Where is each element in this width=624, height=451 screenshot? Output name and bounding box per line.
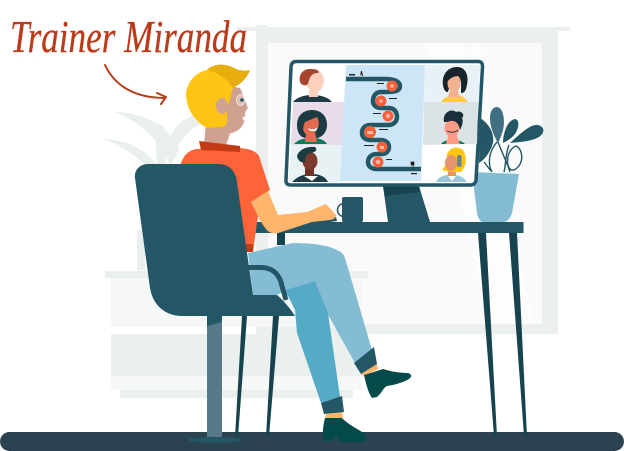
cuff upper [354, 347, 377, 374]
chair armrest [248, 268, 286, 300]
monitor stand [383, 186, 430, 222]
person 1 [293, 69, 332, 102]
glasses and mouth [236, 94, 247, 122]
shoe upper [364, 369, 411, 398]
face [206, 85, 248, 134]
screen frame [286, 62, 483, 185]
roadmap stops [364, 80, 398, 168]
leaf: far right [510, 125, 543, 143]
desk leg [509, 233, 527, 436]
roadmap panel [340, 65, 425, 181]
title: Trainer Miranda [10, 11, 247, 62]
chair pole [207, 316, 222, 437]
leaf: behind monitor [479, 118, 493, 163]
background plant [104, 112, 205, 270]
arm [251, 191, 336, 233]
ankle upper [361, 364, 378, 376]
person 6 [436, 148, 467, 182]
cuff lower [321, 396, 344, 414]
desk [255, 222, 527, 436]
chair leg [235, 316, 247, 437]
roadmap labels [349, 71, 417, 174]
leaf: center [490, 107, 504, 143]
background sideboard [105, 271, 368, 398]
mouse [312, 217, 337, 222]
person 2 [294, 110, 327, 144]
arrow [105, 65, 166, 104]
monitor [286, 62, 483, 185]
neck [204, 122, 232, 145]
vase [472, 172, 519, 222]
mug [338, 197, 363, 222]
desk leg small [277, 233, 285, 245]
front leg [285, 281, 340, 403]
chair leg [266, 316, 279, 437]
collar [199, 141, 240, 152]
raised lower leg and thigh [248, 243, 372, 363]
roadmap path [346, 79, 421, 169]
participant cells [289, 65, 480, 182]
desk top [255, 222, 524, 233]
ear [216, 98, 228, 114]
desk leg [478, 233, 497, 436]
person 4 [441, 67, 468, 102]
plant stems [484, 142, 522, 172]
chair [135, 164, 295, 443]
plant on desk [472, 107, 543, 222]
shirt [180, 148, 270, 252]
person 3 [292, 147, 328, 182]
shoe lower [323, 418, 366, 442]
chair base [188, 437, 241, 443]
trainer [180, 65, 411, 442]
person 5 [441, 110, 465, 144]
leaf: dark [503, 119, 518, 143]
ankle lower [325, 411, 343, 418]
background window [237, 25, 570, 334]
hair [186, 65, 250, 128]
chair back and seat [135, 164, 295, 316]
roadmap icons [367, 84, 394, 164]
floor [0, 432, 624, 451]
